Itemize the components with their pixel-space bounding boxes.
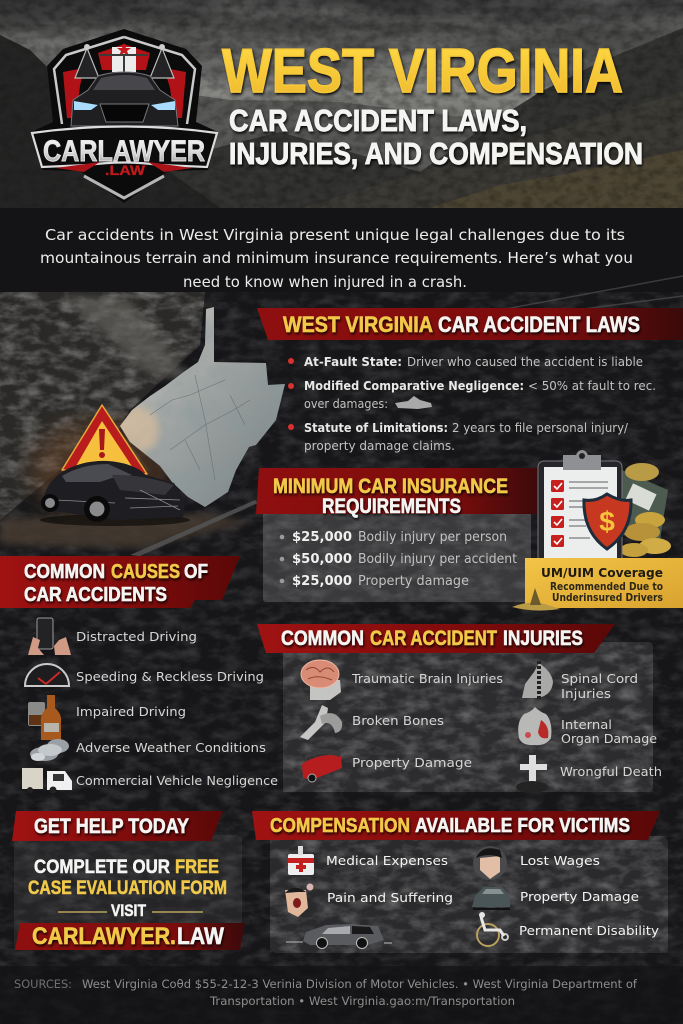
icon: dark car: [472, 887, 510, 909]
panel: compensation: Medical Expenses: [326, 853, 448, 868]
heading: compensation: COMPENSATION: [270, 815, 410, 837]
list: accident laws: Statute of Limitations:: [304, 420, 448, 435]
icon: cross: [516, 755, 548, 793]
icon: money pile: [620, 463, 671, 557]
list: accident laws: Driver who caused the accident is liable: [407, 354, 643, 369]
icon: clipboard with shield: $: [599, 506, 615, 537]
panel: common injuries: Spinal Cord: [561, 671, 638, 686]
panel: compensation: Pain and Suffering: [327, 890, 453, 905]
insurance amounts: Bodily injury per person: [358, 530, 507, 545]
list: common causes: Commercial Vehicle Negligence: [76, 773, 278, 788]
heading: West Virginia car accident laws: [257, 308, 683, 340]
heading: minimum insurance: REQUIREMENTS: [322, 495, 461, 518]
call to action text: FREE: [175, 857, 219, 878]
map of West Virginia: [120, 307, 285, 507]
panel: common injuries: Traumatic Brain Injuries: [351, 671, 503, 686]
icon: crashed car: [286, 924, 392, 948]
icon: damaged red car: [302, 749, 342, 782]
icon: warning triangle: [62, 405, 147, 474]
insurance amounts: Property damage: [358, 574, 469, 589]
insurance amounts: $25,000: [292, 530, 352, 545]
list: common causes: Impaired Driving: [76, 704, 186, 719]
panel: common injuries: Property Damage: [352, 755, 472, 770]
intro text: [40, 226, 633, 291]
icon: worker face: [473, 846, 507, 880]
insurance amounts: $50,000: [292, 552, 352, 567]
insurance amounts: Bodily injury per accident: [358, 552, 517, 567]
logo wordmark: CARLAWYER: [43, 135, 205, 168]
panel: common injuries: Broken Bones: [352, 713, 444, 728]
icon: face in pain: [285, 884, 314, 917]
panel: common injuries: Injuries: [561, 686, 611, 701]
icon: phone: [28, 618, 71, 655]
header mountain photo: [0, 0, 683, 208]
intro band: [0, 208, 683, 292]
panel: compensation: Permanent Disability: [519, 923, 660, 938]
list: accident laws: 2 years to file personal injury/: [452, 420, 629, 435]
icon: first aid kit: [288, 846, 314, 875]
intro text: mountainous terrain and minimum insurance requirements. Here’s what you: [40, 249, 633, 267]
panel: minimum insurance: [256, 468, 540, 602]
callout: UM/UIM coverage: UM/UIM Coverage: [541, 565, 663, 580]
subtitle line 1: CAR ACCIDENT LAWS,: [229, 103, 527, 138]
website banner: CARLAWYER.: [32, 923, 176, 950]
icon: brain: [301, 660, 341, 700]
sources: SOURCES:: [14, 977, 72, 991]
heading: common causes: OF: [184, 561, 208, 583]
callout: UM/UIM coverage: Underinsured Drivers: [552, 592, 663, 604]
list: accident laws: [288, 354, 656, 453]
heading: compensation: AVAILABLE FOR VICTIMS: [415, 815, 630, 837]
panel: compensation: [252, 811, 668, 953]
road and cliff scene: [0, 276, 683, 556]
panel: common injuries: Internal: [561, 717, 612, 732]
insurance amounts: $25,000: [292, 574, 352, 589]
heading: West Virginia car accident laws: CAR ACCIDENT LAWS: [438, 312, 640, 337]
heading: minimum insurance: [256, 468, 540, 518]
title: WEST VIRGINIA: [222, 37, 623, 106]
icon: truck: [22, 768, 72, 794]
logo .law: .LAW: [105, 162, 146, 178]
panel: compensation: Property Damage: [520, 889, 639, 904]
heading: West Virginia car accident laws: WEST VIRGINIA: [283, 312, 433, 337]
icon: internal organs: [518, 707, 551, 745]
icon: spine: [522, 661, 553, 699]
heading: compensation: [252, 811, 660, 840]
insurance amounts: [280, 530, 517, 589]
intro text: need to know when injured in a crash.: [183, 273, 467, 291]
title: [222, 37, 643, 171]
heading: common causes: CAUSES: [111, 561, 180, 583]
callout: UM/UIM coverage: [512, 558, 683, 611]
list: common causes: Speeding & Reckless Driving: [76, 669, 264, 684]
logo: CarLawyer.Law shield: [31, 29, 218, 203]
panel: common injuries: [257, 624, 662, 793]
heading: get help today: GET HELP TODAY: [34, 815, 189, 838]
list: accident laws: property damage claims.: [304, 438, 455, 453]
sources: [0, 966, 683, 1024]
callout: UM/UIM coverage: Recommended Due to: [550, 581, 663, 593]
sources: West Virginia Coθd $55-2-12-3 Verinia Division of Motor Vehicles. • West Virginia Department of: [82, 977, 638, 991]
logo car: [71, 72, 178, 126]
icon: speedometer: [25, 664, 69, 686]
list: common causes: Adverse Weather Conditions: [76, 740, 266, 755]
panel: common injuries: Organ Damage: [561, 731, 657, 746]
heading: common causes: CAR ACCIDENTS: [24, 584, 167, 606]
icon: storm clouds: [30, 739, 69, 761]
list: accident laws: < 50% at fault to rec.: [528, 378, 656, 393]
heading: common injuries: COMMON: [281, 627, 364, 650]
heading: common injuries: CAR ACCIDENT: [370, 627, 497, 650]
icon: broken arm: [300, 705, 342, 740]
list: common causes: Distracted Driving: [76, 629, 197, 644]
list: accident laws: Modified Comparative Negligence:: [304, 378, 524, 393]
heading: common injuries: INJURIES: [503, 627, 583, 650]
icon: clipboard with shield: [538, 450, 631, 565]
icon: wheelchair: [477, 912, 508, 946]
call to action text: CASE EVALUATION FORM: [28, 878, 227, 899]
call to action text: [28, 857, 227, 920]
list: accident laws: At-Fault State:: [304, 354, 402, 369]
heading: minimum insurance: MINIMUM CAR INSURANCE: [273, 475, 508, 498]
list: common causes: [22, 618, 278, 794]
intro text: Car accidents in West Virginia present unique legal challenges due to its: [45, 226, 625, 244]
heading: get help today: [12, 811, 223, 841]
website banner: LAW: [177, 923, 224, 950]
heading: common injuries: [257, 624, 615, 653]
list: accident laws: over damages:: [304, 396, 388, 411]
icon: crashed black car: [40, 461, 190, 526]
call to action text: VISIT: [111, 901, 147, 920]
sources: Transportation • West Virginia.gao:m/Transportation: [209, 994, 515, 1008]
heading: common causes: COMMON: [24, 561, 105, 583]
heading: common causes: [0, 556, 240, 608]
call to action text: COMPLETE OUR: [34, 857, 170, 878]
panel: get help today: [12, 811, 245, 950]
icon: drink and bottle: [28, 695, 61, 740]
panel: common injuries: Wrongful Death: [560, 764, 662, 779]
panel: compensation: Lost Wages: [520, 853, 600, 868]
